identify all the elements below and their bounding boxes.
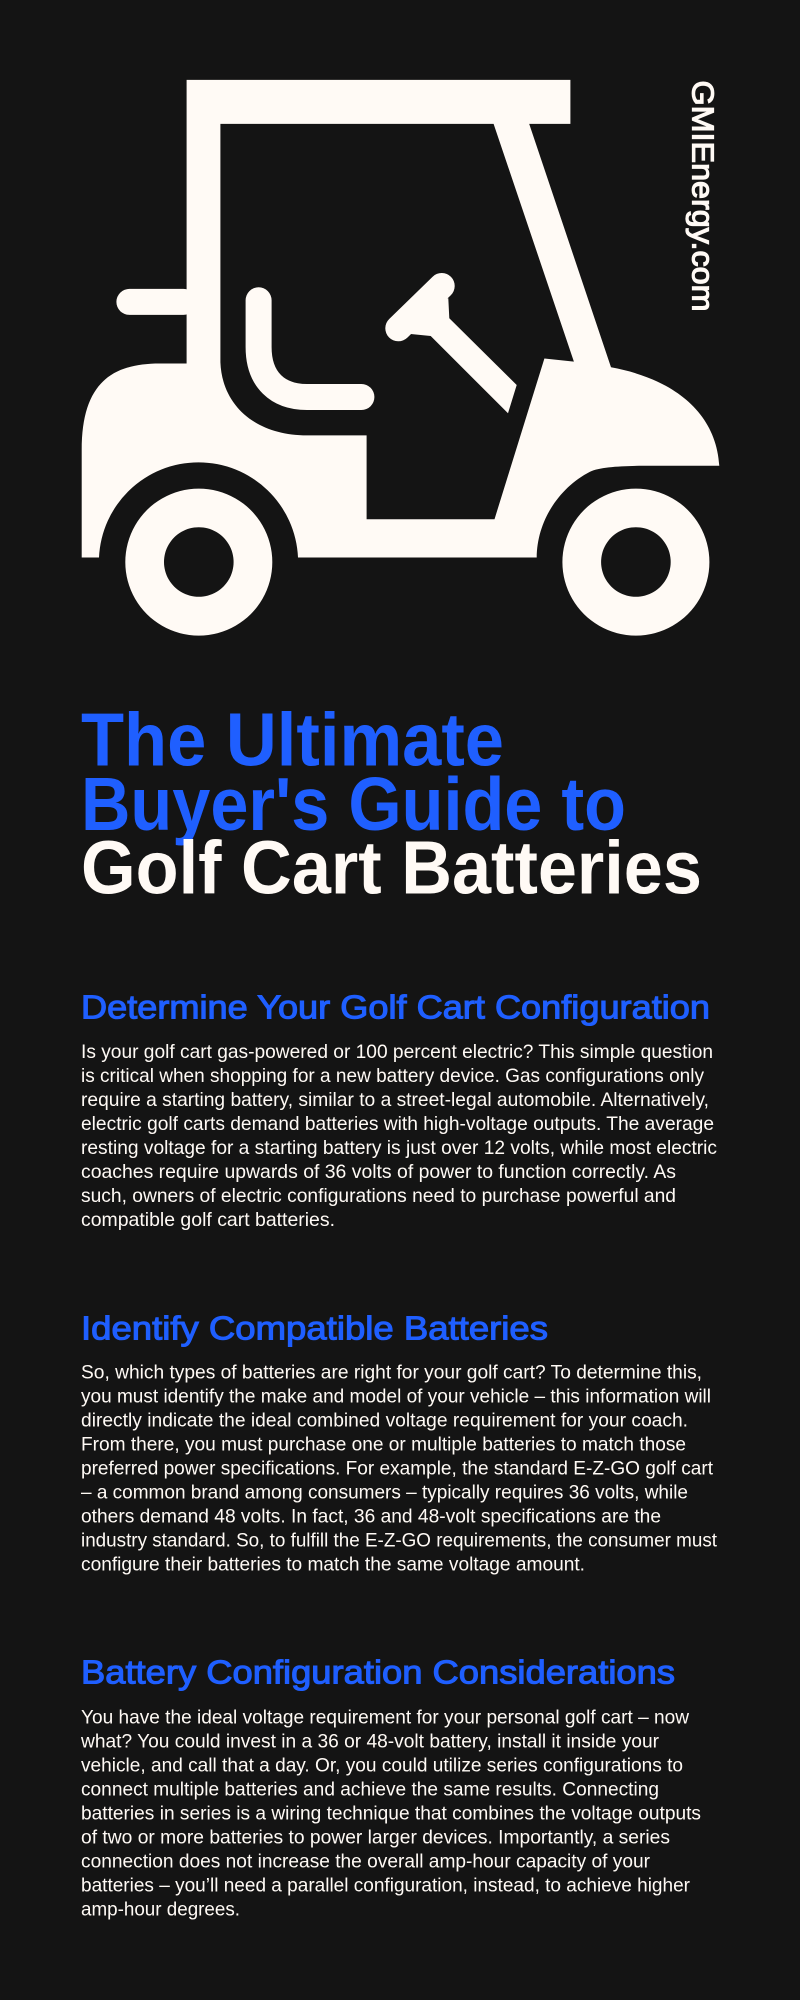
text block: amp-hour degrees. [81, 1899, 240, 1920]
text block: what? You could invest in a 36 or 48-volt battery, install it inside your [80, 1731, 660, 1752]
text block: connection does not increase the overall amp-hour capacity of your [81, 1851, 651, 1872]
text block: connect multiple batteries and achieve the same results. Connecting [81, 1779, 659, 1800]
title: Golf Cart Batteries [81, 826, 702, 910]
title: The Ultimate [81, 698, 504, 782]
text block: such, owners of electric configurations need to purchase powerful and [81, 1186, 676, 1207]
panel: golf cart configuration [81, 989, 717, 1231]
heading: Identify Compatible Batteries [81, 1310, 548, 1347]
text block: coaches require upwards of 36 volts of power to function correctly. As [81, 1162, 676, 1183]
text block: – a common brand among consumers – typically requires 36 volts, while [81, 1482, 688, 1503]
text block: batteries – you’ll need a parallel configuration, instead, to achieve higher [81, 1875, 691, 1896]
text block: resting voltage for a starting battery is just over 12 volts, while most electric [81, 1138, 717, 1159]
steering wheel [398, 286, 517, 413]
right wheel [562, 489, 709, 636]
heading: Determine Your Golf Cart Configuration [81, 989, 710, 1026]
text block: From there, you must purchase one or multiple batteries to match those [81, 1434, 686, 1455]
text block: batteries in series is a wiring technique that combines the voltage outputs [81, 1803, 701, 1824]
text block: Is your golf cart gas-powered or 100 percent electric? This simple question [81, 1042, 713, 1063]
heading: Battery Configuration Considerations [81, 1654, 675, 1691]
text block: vehicle, and call that a day. Or, you could utilize series configurations to [81, 1755, 683, 1776]
text block: you must identify the make and model of your vehicle – this information will [81, 1386, 711, 1407]
text block: of two or more batteries to power larger devices. Importantly, a series [81, 1827, 670, 1848]
panel: battery configuration considerations [80, 1654, 701, 1920]
text block: So, which types of batteries are right for your golf cart? To determine this, [81, 1362, 702, 1383]
text block [80, 1707, 701, 1920]
text block: require a starting battery, similar to a street-legal automobile. Alternatively, [81, 1090, 709, 1111]
cart body and roof [82, 80, 719, 558]
text block: is critical when shopping for a new battery device. Gas configurations only [81, 1066, 704, 1087]
rear grab bar [116, 289, 196, 315]
text block: You have the ideal voltage requirement for your personal golf cart – now [81, 1707, 689, 1728]
title: Buyer's Guide to [81, 762, 626, 846]
text block: directly indicate the ideal combined voltage requirement for your coach. [81, 1410, 688, 1431]
icon: golf cart [82, 80, 719, 636]
text block [81, 1042, 717, 1231]
title [81, 698, 702, 910]
text block [81, 1362, 718, 1575]
text block: compatible golf cart batteries. [81, 1210, 335, 1231]
text block: others demand 48 volts. In fact, 36 and 48-volt specifications are the [81, 1506, 661, 1527]
left wheel [125, 489, 272, 636]
panel: compatible batteries [81, 1310, 718, 1575]
text block: configure their batteries to match the same voltage amount. [81, 1554, 585, 1575]
text block: preferred power specifications. For example, the standard E-Z-GO golf cart [81, 1458, 714, 1479]
text block: industry standard. So, to fulfill the E-Z-GO requirements, the consumer must [81, 1530, 718, 1551]
seat [259, 300, 361, 397]
website label: GMIEnergy.com [686, 80, 720, 312]
text block: electric golf carts demand batteries with high-voltage outputs. The average [81, 1114, 714, 1135]
